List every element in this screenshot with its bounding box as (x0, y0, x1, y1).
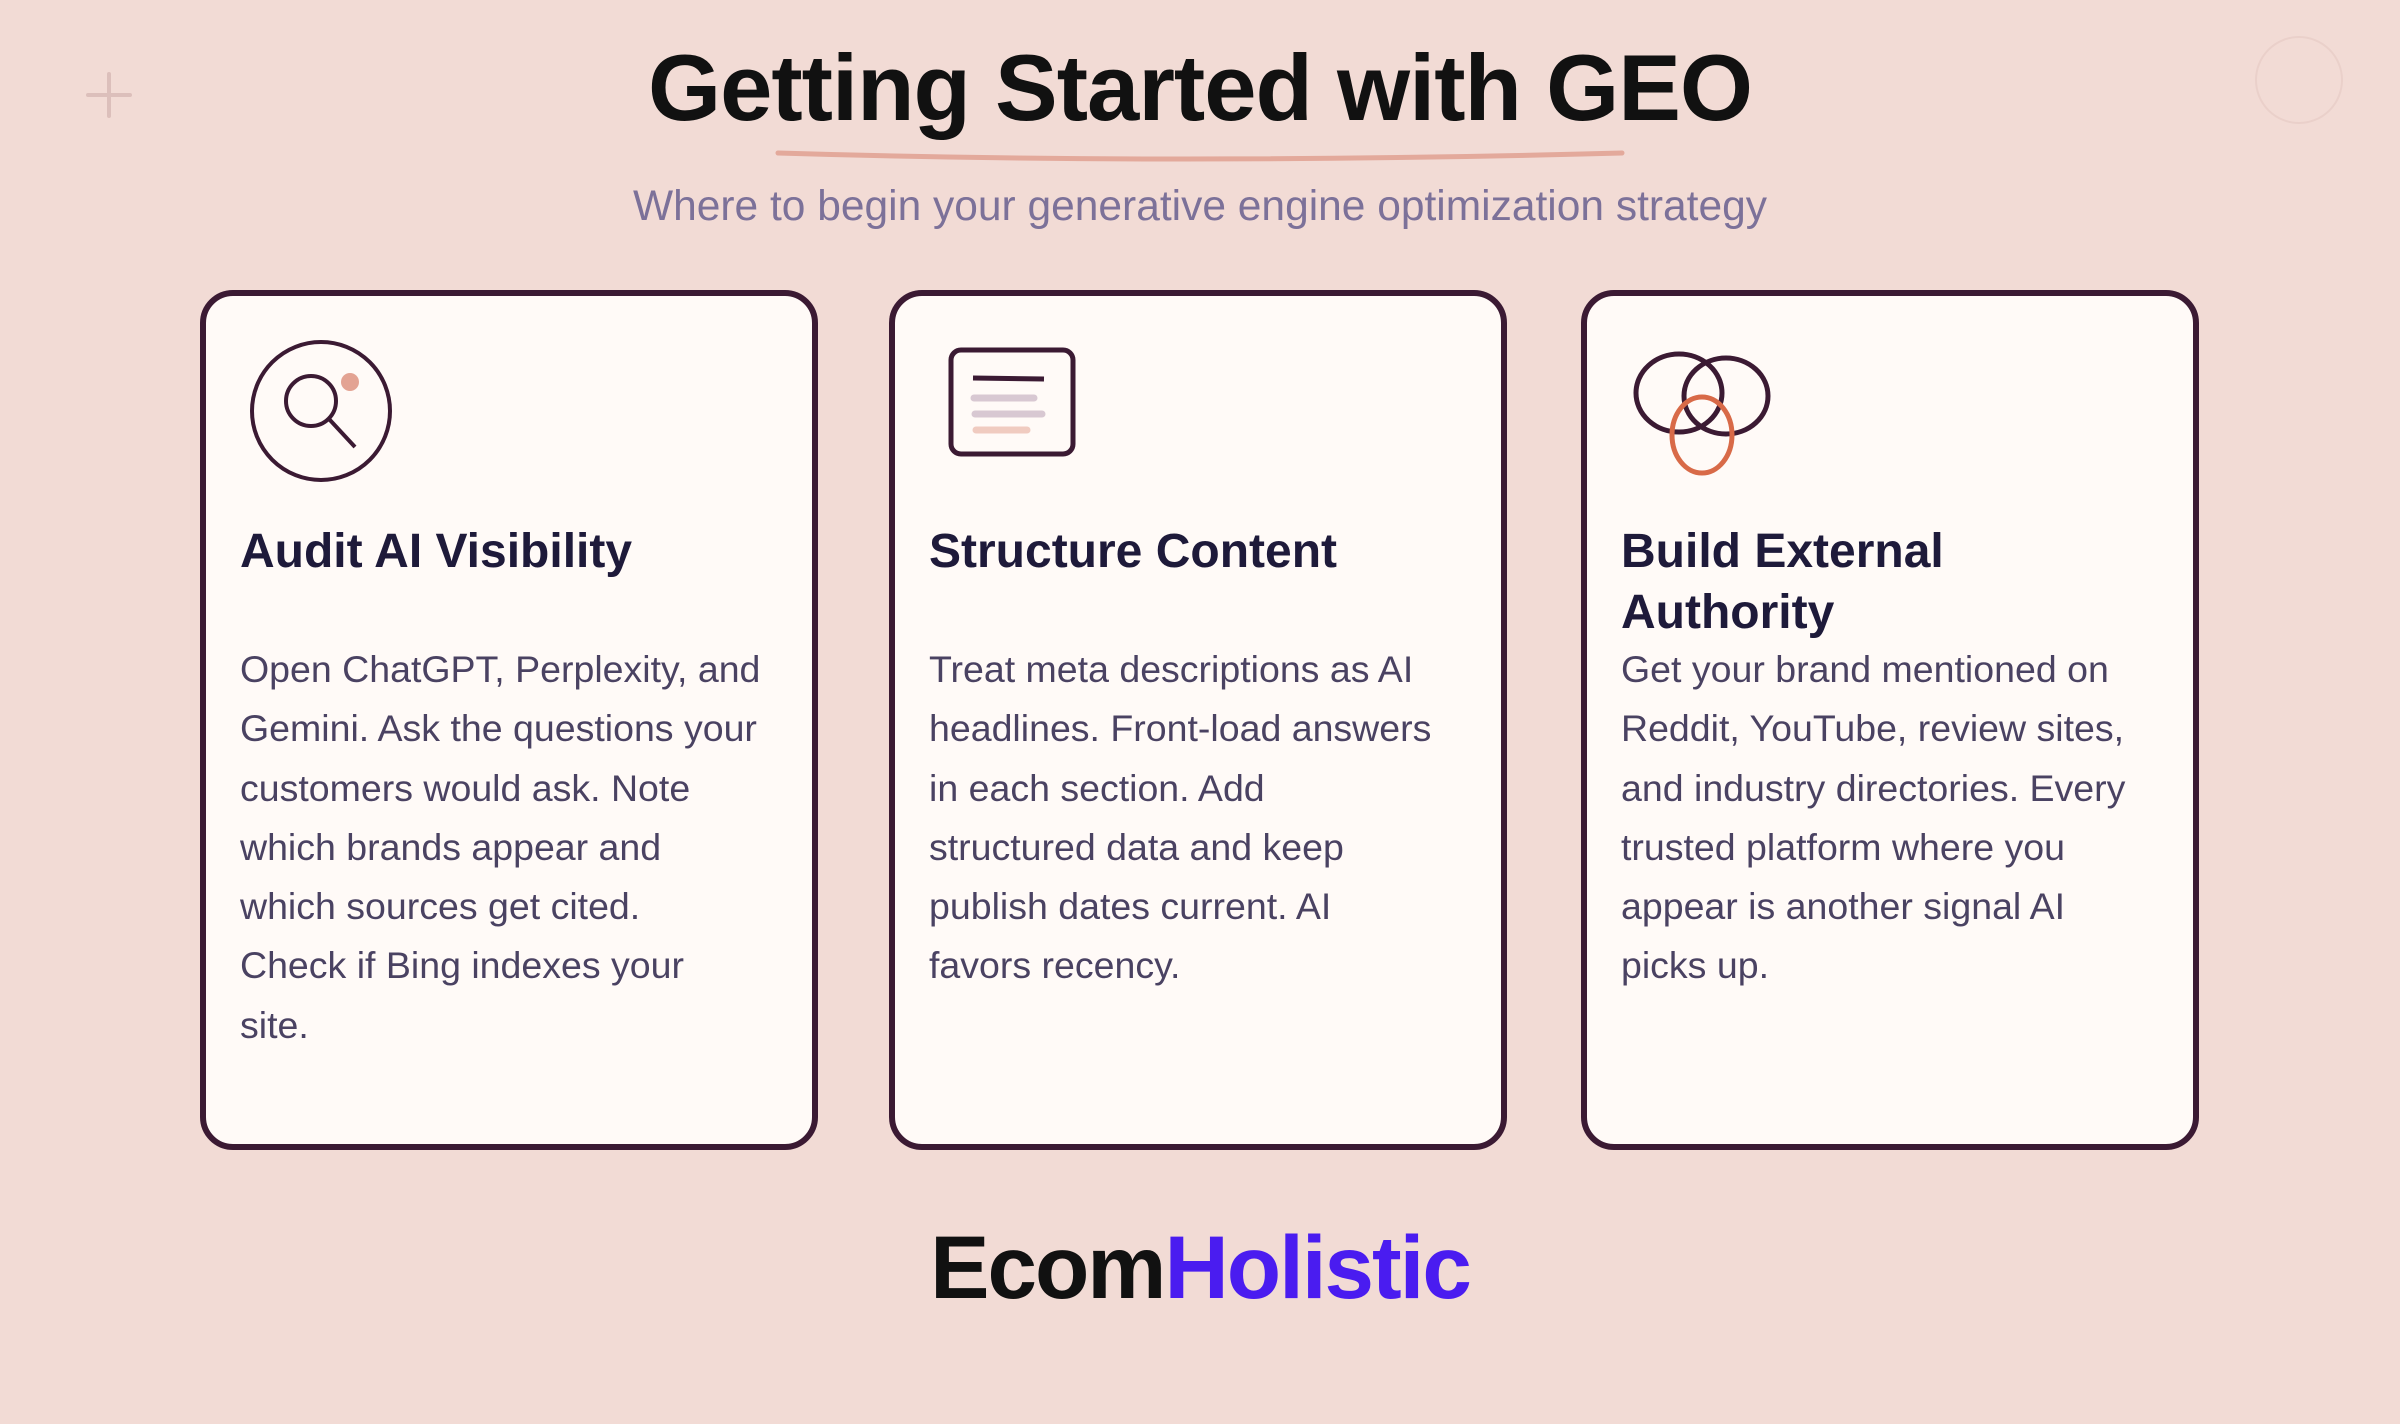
body text (240, 648, 760, 1046)
heading: Structure Content (929, 525, 1337, 578)
body text: Reddit, YouTube, review sites, (1621, 707, 2124, 749)
body text: Treat meta descriptions as AI (929, 648, 1413, 690)
icon: magnifier (250, 340, 392, 482)
body text: headlines. Front-load answers (929, 707, 1431, 749)
panel: structure (889, 290, 1507, 1150)
body text: site. (240, 1004, 309, 1046)
title underline (776, 150, 1624, 162)
icon: document (948, 348, 1076, 456)
body text (929, 648, 1431, 986)
body text: customers would ask. Note (240, 767, 690, 809)
body text: and industry directories. Every (1621, 767, 2125, 809)
body text: Gemini. Ask the questions your (240, 707, 757, 749)
subtitle: Where to begin your generative engine optimization strategy (633, 183, 1767, 230)
heading (1621, 525, 1944, 639)
body text: Check if Bing indexes your (240, 944, 684, 986)
body text: trusted platform where you (1621, 826, 2065, 868)
body text: picks up. (1621, 944, 1769, 986)
body text (1621, 648, 2126, 986)
title: Getting Started with GEO (648, 35, 1752, 140)
panel: authority (1581, 290, 2199, 1150)
heading: Build External (1621, 525, 1944, 578)
body text: publish dates current. AI (929, 885, 1331, 927)
body text: appear is another signal AI (1621, 885, 2065, 927)
body text: which brands appear and (240, 826, 661, 868)
body text: Open ChatGPT, Perplexity, and (240, 648, 760, 690)
body text: in each section. Add (929, 767, 1265, 809)
body text: structured data and keep (929, 826, 1344, 868)
icon: overlapping circles (1634, 352, 1770, 476)
body text: which sources get cited. (240, 885, 640, 927)
panel: audit (200, 290, 818, 1150)
heading: Authority (1621, 586, 1834, 639)
heading: Audit AI Visibility (240, 525, 632, 578)
body text: Get your brand mentioned on (1621, 648, 2109, 690)
body text: favors recency. (929, 944, 1180, 986)
decorative circle (2255, 36, 2343, 124)
decorative plus (86, 72, 132, 118)
logo: EcomHolistic (930, 1217, 1470, 1317)
